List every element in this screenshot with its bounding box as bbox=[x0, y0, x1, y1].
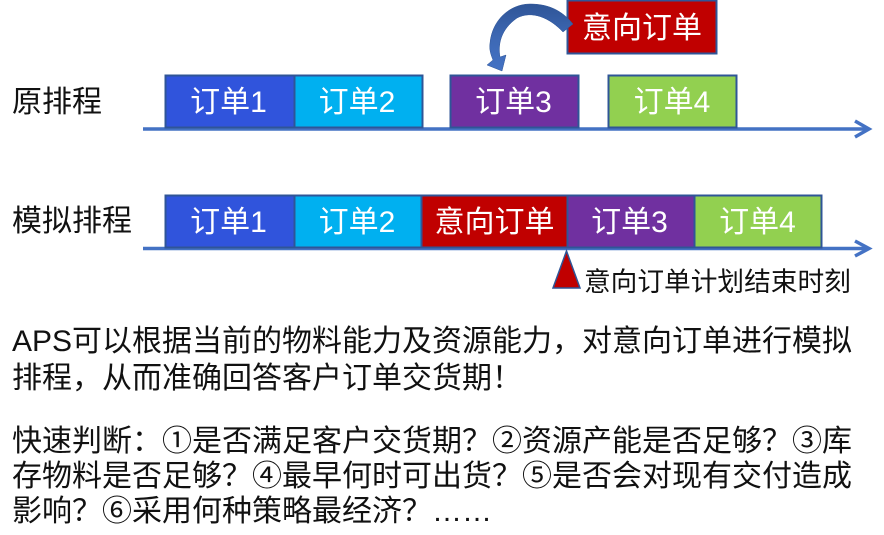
order 2 block: 订单2 bbox=[319, 206, 395, 239]
order 4 block bbox=[608, 76, 736, 128]
order 3 block bbox=[450, 76, 578, 128]
text block: quick judgement questions: 存物料是否足够？④最早何时可出货？⑤是否会对现有交付造成 bbox=[12, 460, 852, 493]
order 2 block: 订单2 bbox=[319, 86, 395, 119]
order 4 block bbox=[694, 196, 822, 248]
label: simulated schedule: 模拟排程 bbox=[12, 205, 132, 238]
intent order block bbox=[568, 0, 716, 54]
marker: intent order planned end time bbox=[553, 251, 580, 288]
order 3 block bbox=[568, 196, 694, 248]
icon: curved arrow from intent order to order 3 bbox=[487, 4, 573, 71]
text block: quick judgement questions: 快速判断：①是否满足客户交货期？②资源产能是否足够？③库 bbox=[12, 425, 852, 458]
text block: quick judgement questions: 影响？⑥采用何种策略最经济？…… bbox=[12, 495, 492, 528]
caption: intent order planned end time: 意向订单计划结束时刻 bbox=[584, 267, 851, 297]
text block: APS summary: APS可以根据当前的物料能力及资源能力，对意向订单进行模拟 bbox=[12, 325, 852, 358]
timeline arrow: original schedule bbox=[143, 121, 869, 137]
intent order block: 意向订单 bbox=[582, 12, 702, 45]
order 2 block bbox=[294, 76, 422, 128]
text block: APS summary: 排程，从而准确回答客户订单交货期！ bbox=[12, 362, 522, 395]
label: original schedule: 原排程 bbox=[12, 86, 102, 119]
row: original schedule bbox=[12, 76, 869, 137]
intent order block bbox=[422, 196, 568, 248]
order 1 block: 订单1 bbox=[190, 86, 267, 119]
order 1 block bbox=[166, 196, 294, 248]
order 1 block bbox=[166, 76, 294, 128]
text block: APS summary bbox=[12, 325, 852, 395]
timeline arrow: simulated schedule bbox=[143, 241, 869, 256]
order 2 block bbox=[294, 196, 422, 248]
order 4 block: 订单4 bbox=[719, 206, 796, 239]
order 4 block: 订单4 bbox=[634, 86, 710, 119]
row: simulated schedule bbox=[12, 196, 869, 256]
order 1 block: 订单1 bbox=[190, 206, 267, 239]
order 3 block: 订单3 bbox=[475, 86, 552, 119]
order 3 block: 订单3 bbox=[591, 206, 668, 239]
text block: quick judgement questions bbox=[12, 425, 852, 528]
intent order block: 意向订单 bbox=[434, 206, 554, 239]
